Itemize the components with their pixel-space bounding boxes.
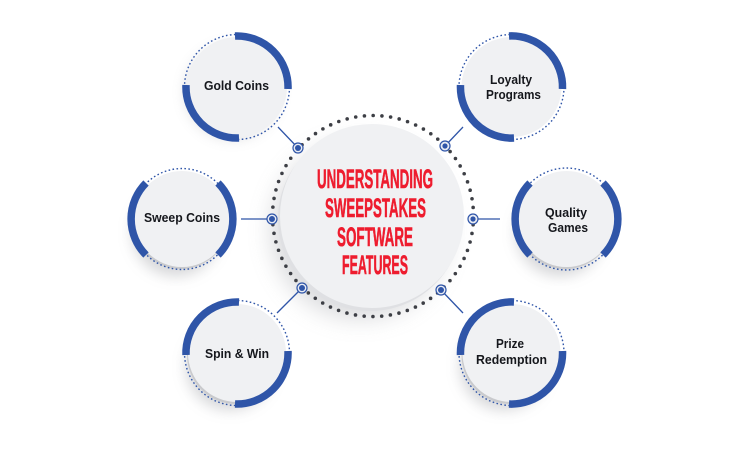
- panel: loyalty programs: [459, 34, 564, 140]
- connector: loyalty programs: [440, 127, 463, 151]
- title: [317, 164, 433, 280]
- title: SWEEPSTAKES: [325, 193, 426, 223]
- panel: sweep coins: [131, 168, 233, 276]
- panel: quality games: [515, 168, 618, 276]
- panel: spin and win: [184, 300, 290, 410]
- connector: spin and win: [277, 283, 307, 313]
- label: Programs: [486, 87, 541, 102]
- panel: gold coins: [184, 34, 290, 140]
- title: FEATURES: [342, 250, 408, 280]
- label: Quality: [545, 205, 588, 220]
- hub disc: [280, 124, 464, 308]
- label: Games: [548, 220, 588, 235]
- label: Gold Coins: [204, 78, 269, 93]
- title: SOFTWARE: [337, 222, 413, 252]
- connector: prize redemption: [436, 285, 463, 313]
- panel: central hub: UNDERSTANDING: [317, 164, 433, 194]
- hub dotted ring: [272, 116, 474, 316]
- hub shadow: [272, 142, 448, 318]
- panel: central hub: [272, 116, 474, 318]
- label: Sweep Coins: [144, 210, 220, 225]
- connector: sweep coins: [241, 214, 277, 224]
- label: Loyalty: [490, 72, 533, 87]
- panel: prize redemption: [459, 300, 564, 410]
- label: [545, 205, 588, 235]
- label: [486, 72, 541, 102]
- label: Spin & Win: [205, 346, 269, 361]
- label: Prize: [496, 336, 524, 351]
- connector: quality games: [468, 214, 500, 224]
- connector: gold coins: [278, 127, 303, 153]
- label: [476, 336, 547, 367]
- label: Redemption: [476, 352, 547, 367]
- hub crescent: [278, 127, 462, 311]
